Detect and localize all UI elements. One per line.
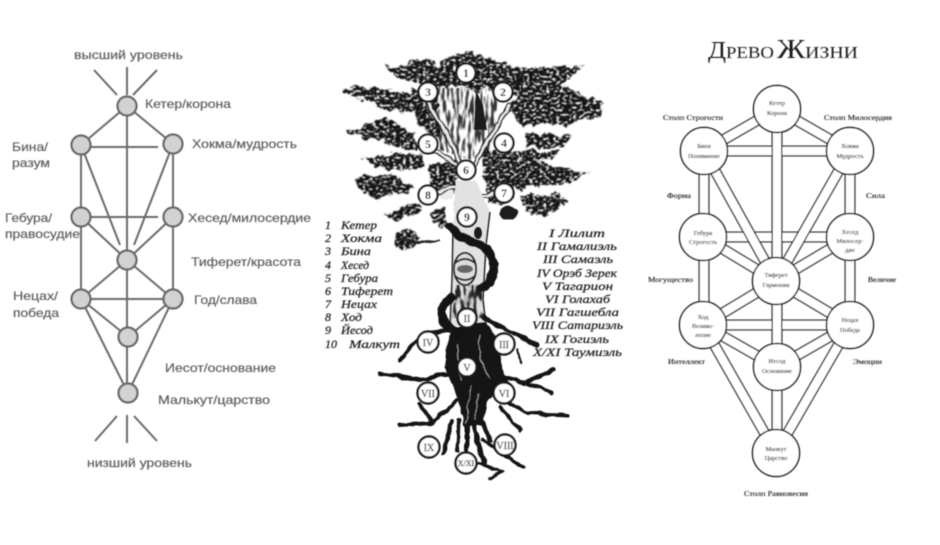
legend: sephirot list: Хесед: [340, 258, 369, 272]
light streaks on the root mass: [457, 335, 490, 422]
panel: left sephirot diagram: [5, 48, 311, 470]
labels of the left diagram: Хесед/милосердие: [188, 211, 311, 225]
sephirot names: Тиферет: [764, 272, 788, 279]
sephirot names: Понимание: [688, 153, 720, 160]
pillar and quality labels: Столп Милосердия: [824, 114, 893, 122]
labels of the left diagram: Гебура/: [5, 211, 53, 225]
title: [708, 34, 858, 64]
legend: sephirot list: Йесод: [340, 322, 373, 337]
roman numeral circles in the roots: [418, 308, 516, 474]
legend: sephirot list: Гебура: [340, 271, 378, 285]
numbered sephirot circles in the crown: 6: [463, 163, 469, 177]
numbered sephirot circles in the crown: 8: [425, 188, 431, 202]
pillar and quality labels: Величие: [868, 276, 896, 284]
roots of the tree: [380, 317, 568, 478]
double-line horizontal paths: [703, 151, 850, 325]
legend: sephirot list: 5: [325, 271, 331, 285]
labels of the left diagram: Нецах/: [13, 289, 59, 303]
legend: qliphoth list: IX Гогиэль: [544, 332, 610, 346]
sephirot names: Строгость: [689, 239, 717, 246]
legend: qliphoth list: VII Гагшебла: [536, 305, 619, 319]
roman numeral circles in the roots: IV: [423, 338, 434, 349]
sephirot names: Хесед: [842, 229, 859, 236]
legend: sephirot list: 2: [325, 231, 331, 245]
labels of the left diagram: правосудие: [5, 227, 80, 241]
legend: sephirot list: [324, 218, 400, 351]
legend: sephirot list: Ход: [340, 310, 362, 324]
dark foliage ball and light patch: [440, 186, 518, 220]
legend: sephirot list: 3: [324, 244, 331, 258]
trunk of the tree: [450, 180, 490, 325]
labels of the left diagram: Иесот/основание: [165, 361, 276, 375]
pillar and quality labels: Форма: [667, 192, 692, 200]
legend: qliphoth list: IV Орэб Зерек: [536, 266, 617, 280]
legend: sephirot list: Кетер: [340, 218, 377, 232]
labels of the left diagram: низший уровень: [87, 456, 192, 470]
legend: qliphoth list: X/XI Таумиэль: [532, 345, 623, 359]
title: ЖИЗНИ: [777, 34, 858, 64]
numbered sephirot circles in the crown: 1: [463, 66, 469, 80]
numbered sephirot circles in the crown: 4: [501, 136, 507, 150]
legend: sephirot list: Хокма: [340, 231, 382, 245]
sephirot names: [688, 100, 864, 462]
legend: sephirot list: Тиферет: [341, 284, 393, 298]
legend: qliphoth list: [532, 226, 624, 359]
sephirot names: лепие: [695, 332, 711, 339]
labels of the left diagram: Тиферет/красота: [191, 255, 301, 269]
title: ДРЕВО: [708, 38, 774, 64]
roman numeral circles in the roots: VI: [499, 389, 509, 400]
sephirot names: Царство: [765, 455, 787, 462]
legend: qliphoth list: VIII Сатариэль: [532, 318, 624, 332]
legend: sephirot list: Малкут: [348, 337, 400, 351]
sephirot names: Нецах: [841, 317, 859, 324]
inner crown shading: [432, 88, 498, 160]
pillar and quality labels: Эмоции: [853, 358, 882, 366]
legend: qliphoth list: V Тагарион: [542, 279, 613, 293]
labels of the left diagram: победа: [13, 306, 59, 320]
legend: qliphoth list: II Гамалиэль: [536, 239, 618, 253]
roman numeral circles in the roots: VIII: [496, 441, 514, 452]
pillar and quality labels: Сила: [866, 192, 886, 200]
pillar and quality labels: Интеллект: [668, 358, 705, 366]
numbered sephirot circles in the crown: 2: [500, 85, 506, 99]
foliage of the tree: [342, 52, 603, 252]
roman numeral circles in the roots: V: [463, 363, 471, 374]
sephirot names: Велико-: [692, 323, 714, 330]
numbered sephirot circles in the crown: 7: [501, 186, 507, 200]
nodes of the left diagram: [72, 96, 182, 402]
legend: sephirot list: 6: [325, 284, 331, 298]
legend: sephirot list: 4: [325, 258, 331, 272]
sephirot names: дие: [845, 247, 855, 254]
sephirot names: Гармония: [763, 282, 789, 289]
double-line diagonal paths: [703, 109, 850, 453]
legend: sephirot list: 7: [325, 297, 332, 311]
panel: central tree illustration: [324, 52, 624, 478]
pillar and quality labels: Могущество: [648, 276, 694, 284]
labels of the left diagram: Малькут/царство: [158, 393, 270, 407]
sephirot names: Ход: [698, 314, 709, 321]
legend: sephirot list: 10: [325, 337, 337, 351]
pillar and quality labels: [648, 114, 896, 498]
legend: sephirot list: Бина: [340, 244, 371, 258]
double-line pillar paths: [704, 151, 850, 325]
legend: sephirot list: 1: [325, 218, 331, 232]
sephirot names: Кетер: [769, 100, 785, 107]
light branches: [400, 103, 510, 242]
sephirot names: Бина: [697, 143, 711, 150]
sephirot names: Гебура: [694, 230, 712, 237]
legend: sephirot list: 8: [325, 310, 331, 324]
legend: sephirot list: Нецах: [340, 297, 378, 311]
roman numeral circles in the roots: X/XI: [458, 459, 475, 468]
labels of the left diagram: Бина/: [12, 140, 49, 154]
panel: right tree of life diagram: [648, 34, 896, 498]
sephirot names: Основание: [762, 368, 792, 375]
sephirot names: Иесод: [768, 358, 786, 365]
legend: qliphoth list: I Лилит: [548, 226, 605, 240]
sephirot names: Победа: [840, 327, 860, 334]
labels of the left diagram: Хокма/мудрость: [192, 137, 297, 151]
labels of the left diagram: [5, 48, 311, 470]
labels of the left diagram: Год/слава: [194, 293, 257, 307]
sephirot names: Хокма: [841, 143, 859, 150]
numbered sephirot circles in the crown: 9: [464, 210, 470, 224]
pillar and quality labels: Столп Равновесия: [744, 490, 809, 498]
eye symbol on the trunk: [454, 253, 476, 285]
numbered sephirot circles in the crown: 3: [425, 85, 431, 99]
sephirot names: Милосер-: [836, 238, 864, 245]
sephirot names: Корона: [767, 110, 787, 117]
roman numeral circles in the roots: II: [464, 314, 470, 325]
numbered sephirot circles in the crown: [418, 64, 514, 226]
sephirot circles: [680, 86, 874, 476]
double-line central pillar path: [772, 109, 782, 453]
roman numeral circles in the roots: IX: [424, 443, 435, 454]
legend: qliphoth list: III Самаэль: [542, 252, 614, 266]
legend: sephirot list: 9: [325, 323, 331, 337]
sephirot names: Малкут: [765, 446, 787, 453]
pillar and quality labels: Столп Строгости: [663, 114, 723, 122]
roman numeral circles in the roots: VII: [421, 389, 435, 400]
labels of the left diagram: высший уровень: [74, 48, 183, 62]
legend: qliphoth list: VI Голахаб: [545, 292, 611, 306]
labels of the left diagram: разум: [12, 156, 50, 170]
numbered sephirot circles in the crown: 5: [425, 137, 431, 151]
serpent coiled around the trunk: [441, 227, 494, 332]
roman numeral circles in the roots: III: [499, 340, 509, 351]
sephirot names: Мудрость: [836, 153, 864, 160]
connecting lines of the left diagram: [81, 67, 173, 443]
labels of the left diagram: Кетер/корона: [145, 97, 231, 111]
